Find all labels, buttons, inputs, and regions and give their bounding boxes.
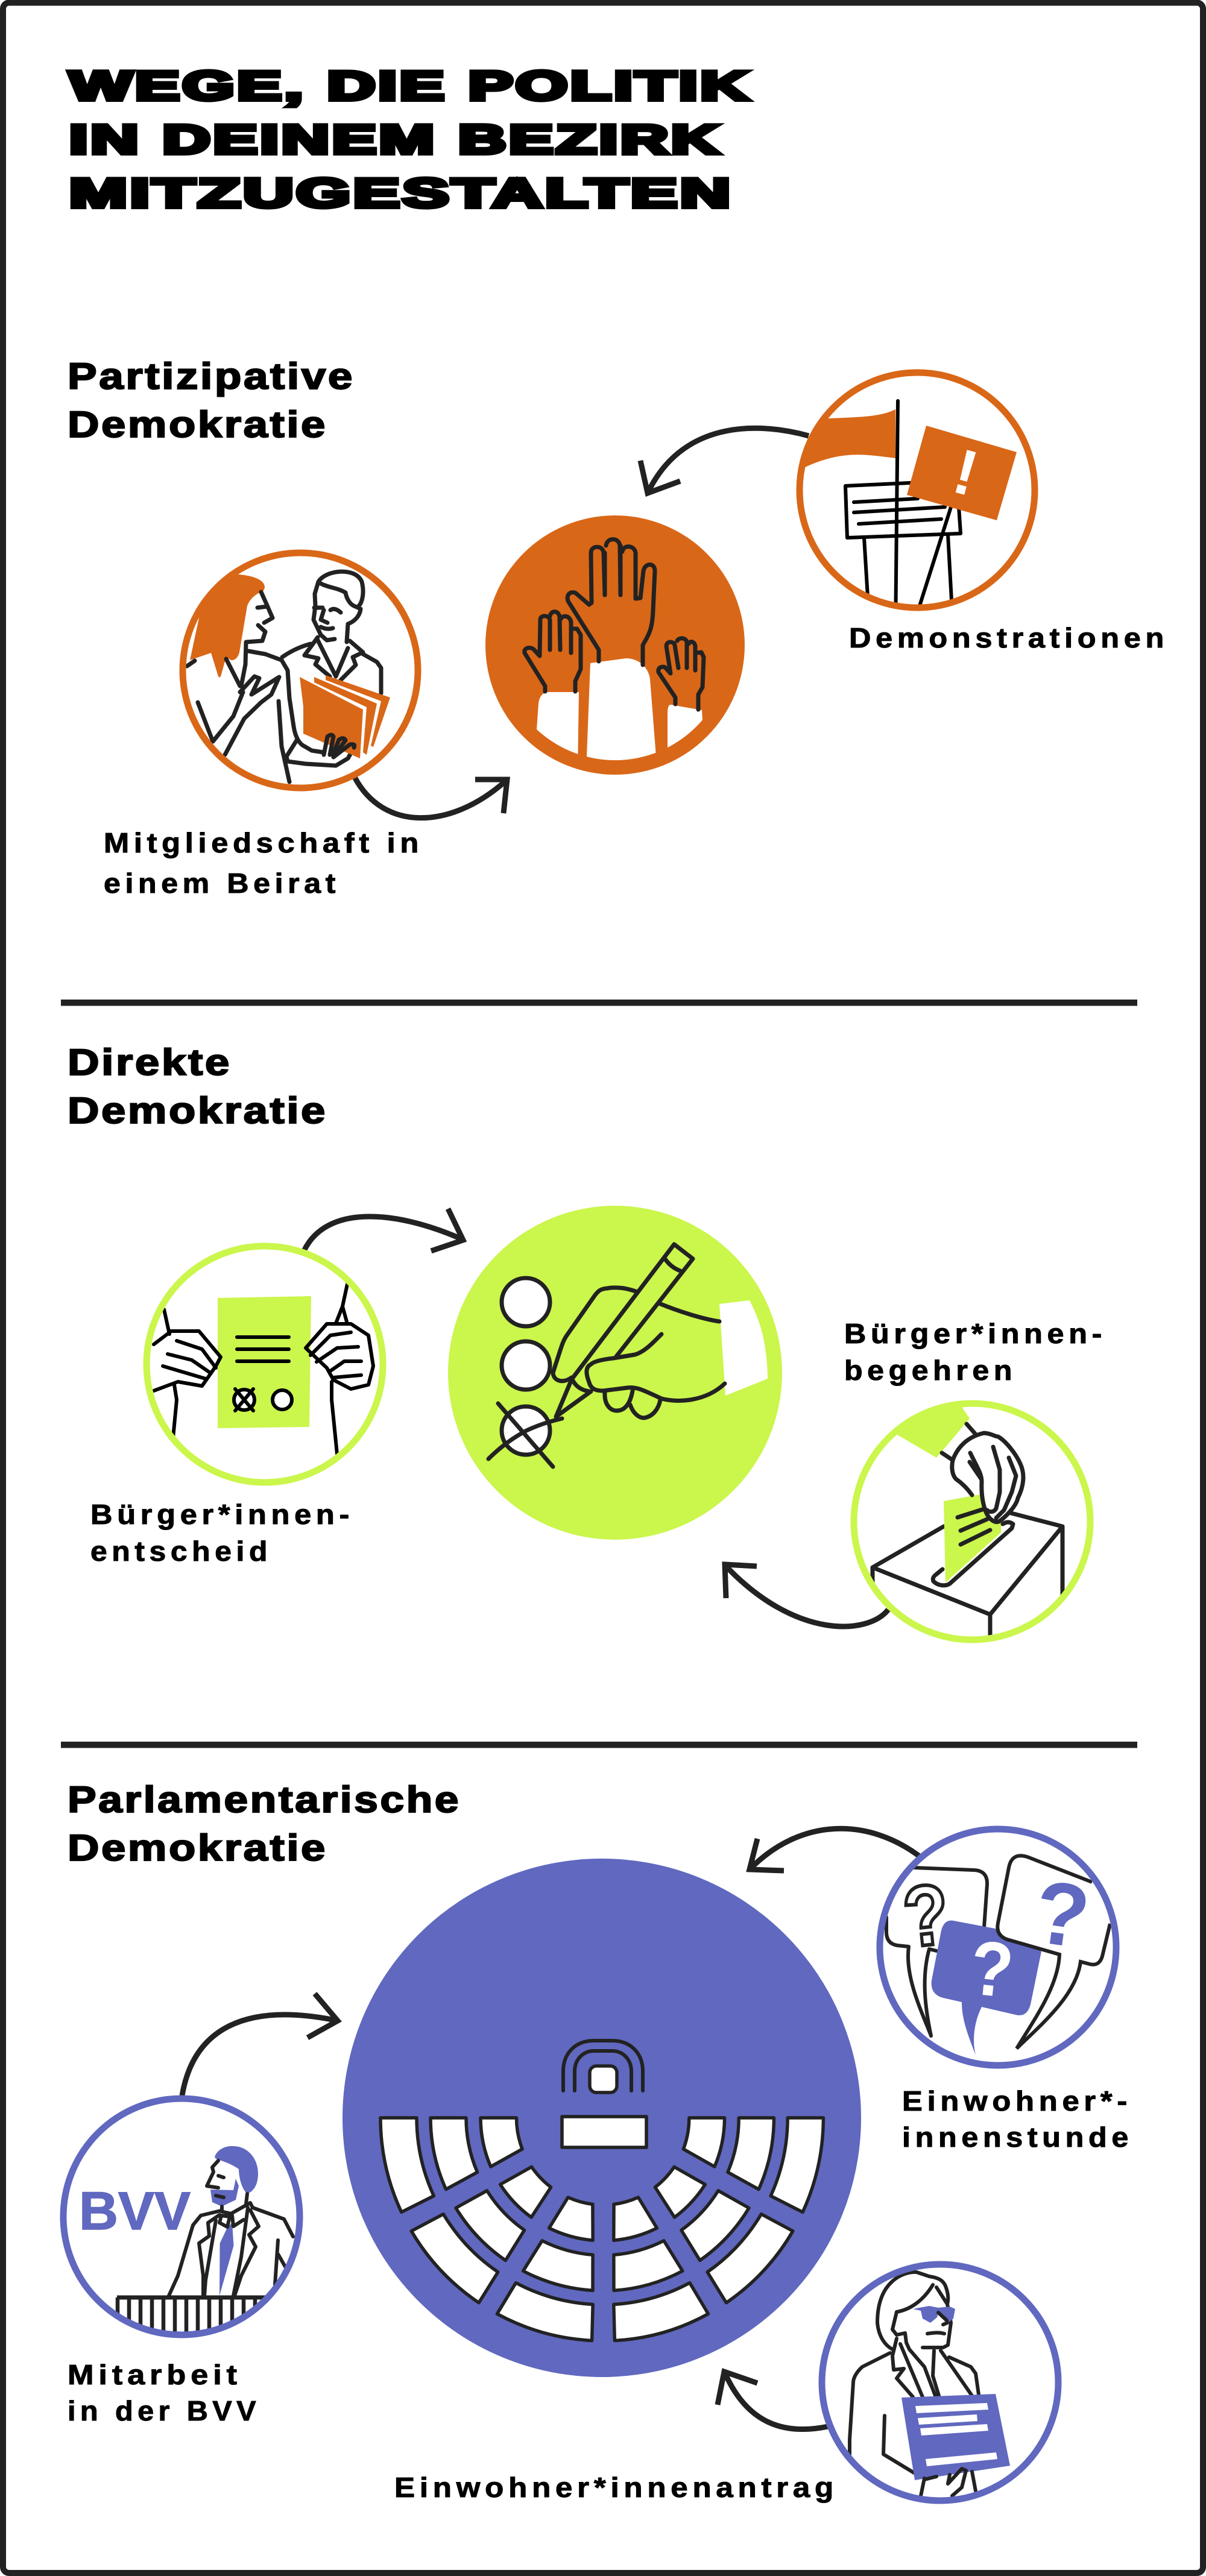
right hand (658, 638, 704, 710)
woman (241, 592, 324, 752)
icon: Bürger*innenentscheid (147, 1246, 383, 1482)
icon: centre raised hands (485, 515, 745, 775)
title: WEGE, DIE POLITIK (69, 63, 751, 109)
label: Mitgliedschaft in einem Beirat: einem Beirat (104, 868, 340, 899)
man (314, 572, 363, 642)
icon: parliament (343, 1859, 861, 2377)
icon: Einwohner*innenantrag (822, 2264, 1058, 2501)
label: Mitarbeit in der BVV: Mitarbeit (68, 2359, 242, 2390)
label: Mitgliedschaft in einem Beirat: Mitgliedschaft in (104, 827, 423, 858)
arrow: Demonstrationen to centre (640, 428, 809, 493)
icon: Mitgliedschaft in einem Beirat (181, 553, 418, 788)
label: Bürger*innenentscheid: Bürger*innen- (90, 1499, 354, 1530)
label: Mitarbeit in der BVV: in der BVV (68, 2395, 260, 2426)
label: Bürger*innenbegehren: begehren (844, 1355, 1017, 1386)
icon: Mitarbeit in der BVV (63, 2099, 300, 2339)
title (69, 63, 751, 216)
label: Einwohner*innenstunde: innenstunde (902, 2121, 1133, 2153)
heading: Parlamentarische Demokratie (68, 1779, 461, 1868)
icon: centre ballot hand (448, 1206, 782, 1540)
icon: Einwohner*innenstunde: ? (1029, 1862, 1095, 1968)
label: Bürger*innenentscheid (90, 1499, 354, 1567)
heading: Direkte Demokratie: Demokratie (68, 1090, 327, 1131)
heading: Partizipative Demokratie: Demokratie (68, 404, 327, 445)
label: Einwohner*innenantrag: Einwohner*innenantrag (394, 2472, 838, 2503)
icon: Bürger*innenbegehren (854, 1399, 1090, 1643)
left hand (525, 612, 581, 691)
folders (326, 675, 390, 747)
heading: Parlamentarische Demokratie: Demokratie (68, 1827, 327, 1868)
arrow: BVV to centre (182, 1994, 338, 2096)
arrow: Bürgerentscheid to centre (304, 1209, 463, 1251)
arrow: Einwohnerantrag to centre (718, 2372, 828, 2430)
arrow: Einwohnerstunde to centre (750, 1828, 920, 1871)
heading: Direkte Demokratie (68, 1042, 327, 1131)
heading: Partizipative Demokratie: Partizipative (68, 356, 355, 397)
heading: Parlamentarische Demokratie: Parlamentarische (68, 1779, 461, 1820)
label: Bürger*innenbegehren: Bürger*innen- (844, 1318, 1107, 1349)
icon: Demonstrationen (790, 373, 1035, 608)
label: Demonstrationen: Demonstrationen (849, 622, 1169, 653)
seats (380, 2118, 823, 2340)
icon: Demonstrationen: ! (946, 435, 985, 509)
arrow: Mitgliedschaft to centre (355, 777, 507, 818)
label: Einwohner*innenstunde: Einwohner*- (902, 2085, 1132, 2117)
arrow: Bürgerbegehren to centre (725, 1564, 888, 1627)
icon: Einwohner*innenstunde: ? (899, 1866, 953, 1966)
label: Bürger*innenentscheid: entscheid (90, 1535, 272, 1567)
heading: Direkte Demokratie: Direkte (68, 1042, 232, 1083)
heading: Partizipative Demokratie (68, 356, 355, 445)
label: Mitarbeit in der BVV (68, 2359, 260, 2426)
icon: Einwohner*innenstunde (880, 1829, 1116, 2065)
label: Einwohner*innenstunde (902, 2085, 1133, 2153)
label: Mitgliedschaft in einem Beirat (104, 827, 423, 899)
big hand (567, 539, 655, 665)
icon: Einwohner*innenstunde: ? (966, 1924, 1017, 2014)
speaker area (562, 2041, 646, 2147)
title: IN DEINEM BEZIRK (69, 117, 722, 163)
label: Bürger*innenbegehren (844, 1318, 1107, 1386)
title: MITZUGESTALTEN (69, 170, 733, 216)
icon: Mitarbeit in der BVV: BVV (79, 2181, 191, 2241)
